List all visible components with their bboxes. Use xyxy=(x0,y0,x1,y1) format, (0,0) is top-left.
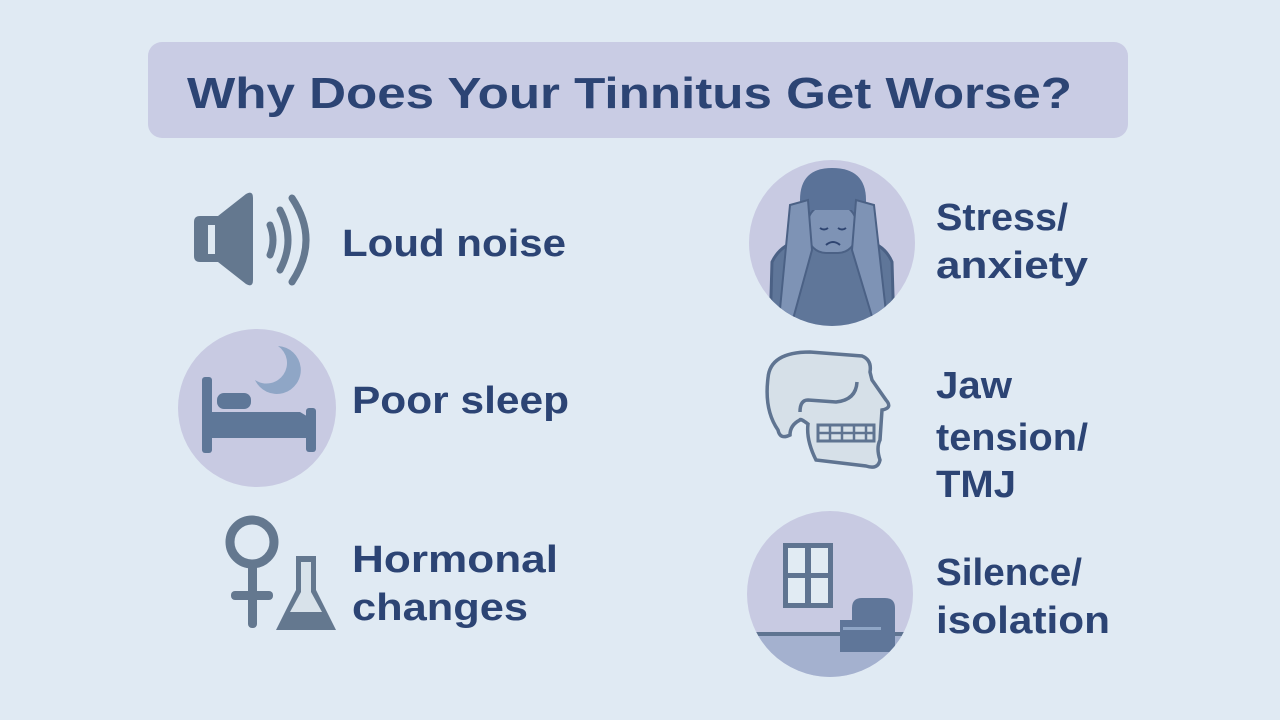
icon: stressed person xyxy=(749,160,915,330)
item: jaw tension: Jaw xyxy=(936,365,1012,407)
item: silence/isolation xyxy=(740,511,1110,685)
icon: venus and flask xyxy=(230,520,336,630)
icon: bed with moon xyxy=(178,329,336,487)
item: silence/isolation: isolation xyxy=(936,600,1110,642)
item: stress/anxiety: Stress/ xyxy=(936,197,1068,239)
icon: empty room xyxy=(747,511,913,677)
item: stress/anxiety: anxiety xyxy=(936,245,1088,287)
item: poor sleep xyxy=(178,329,569,487)
item: jaw tension xyxy=(767,352,1088,506)
item: hormonal changes: changes xyxy=(352,587,528,629)
item: hormonal changes xyxy=(230,520,558,630)
item: hormonal changes: Hormonal xyxy=(352,539,558,581)
item: jaw tension: TMJ xyxy=(936,464,1016,506)
title xyxy=(148,42,1128,138)
item: stress/anxiety xyxy=(749,160,1088,330)
icon: skull xyxy=(767,352,889,467)
item: loud noise xyxy=(194,193,566,285)
item: jaw tension: tension/ xyxy=(936,417,1088,459)
icon: speaker xyxy=(194,193,306,285)
item: poor sleep: Poor sleep xyxy=(352,380,569,422)
item: loud noise: Loud noise xyxy=(342,223,566,265)
item: silence/isolation: Silence/ xyxy=(936,552,1082,594)
title: Why Does Your Tinnitus Get Worse? xyxy=(187,69,1072,118)
